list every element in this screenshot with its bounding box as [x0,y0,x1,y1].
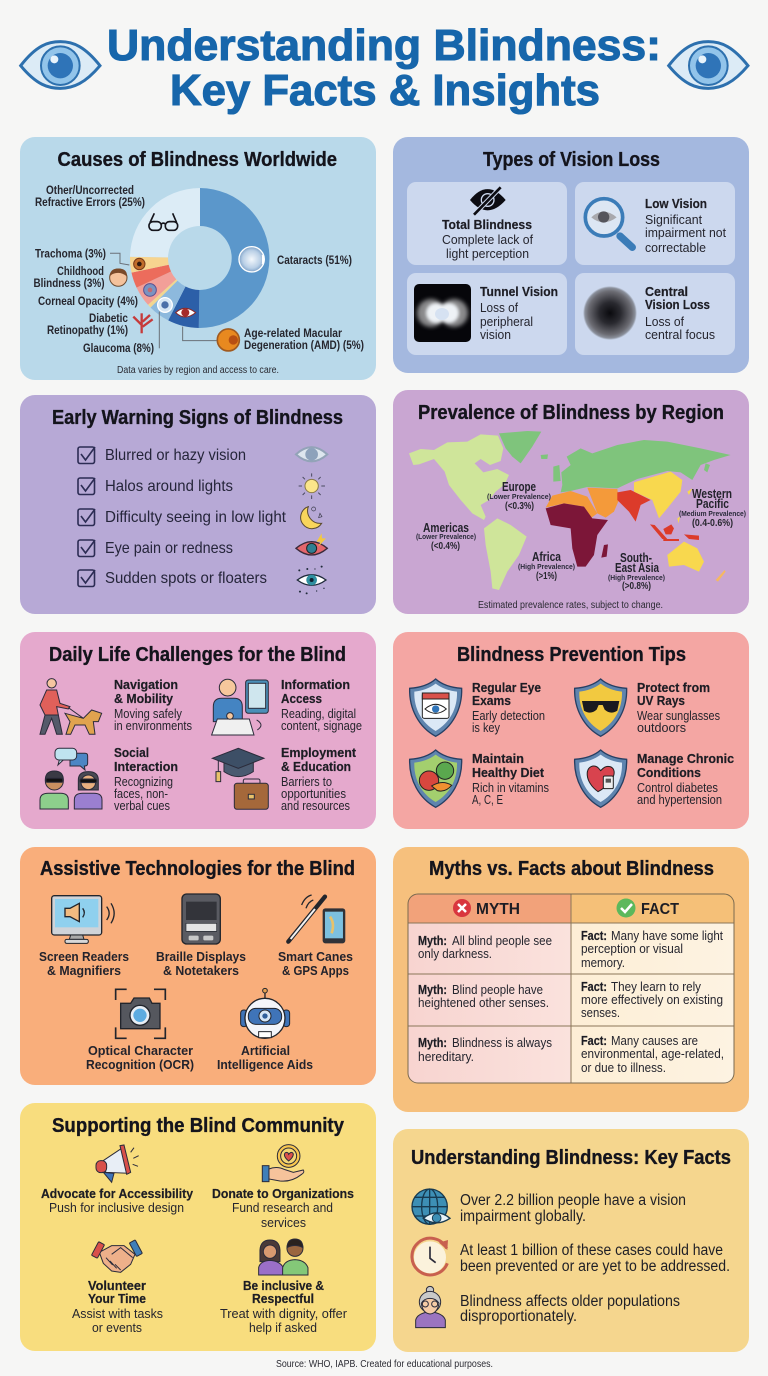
item: be inclusive: Treat with dignity, offer [220,1306,348,1321]
myth cells: hereditary. [418,1049,474,1064]
fact cells: environmental, age-related, [581,1046,724,1061]
checklist: Halos around lights [105,478,233,495]
tip: chronic conditions [575,750,734,807]
item: be inclusive: help if asked [249,1320,317,1335]
donut labels: Retinopathy (1%) [47,323,128,337]
item: ai aids: Artificial [241,1043,290,1058]
checklist: Sudden spots or floaters [105,570,267,587]
heading: key facts: Understanding Blindness: Key Facts [411,1147,731,1169]
checklist: Blurred or hazy vision [105,447,246,464]
map labels: South- [620,551,652,565]
item: advocate: Push for inclusive design [49,1200,184,1215]
item: advocate [41,1145,194,1215]
donut labels: Diabetic [89,311,128,325]
map labels: (High Prevalence) [608,573,665,582]
panel: prevention tips [393,632,749,829]
item: ocr: Optical Character [88,1043,193,1058]
item: employment: Employment [281,745,357,760]
map labels: (<0.3%) [505,501,534,512]
card: low vision: Low Vision [645,196,707,211]
item: be inclusive [220,1239,348,1335]
icons: warning signs [296,447,327,594]
item: braille displays [156,894,246,978]
heading: prevention: Blindness Prevention Tips [457,644,686,666]
tip: regular eye exams: is key [472,721,501,735]
card: central vision loss: central focus [645,327,715,342]
heading: early warning: Early Warning Signs of Blindness [52,407,343,429]
card: low vision: Significant [645,212,702,227]
item: volunteer: Volunteer [88,1278,146,1293]
item: volunteer: Your Time [88,1291,146,1306]
map labels: (Lower Prevalence) [416,532,476,541]
item: screen readers: & Magnifiers [47,963,121,978]
heading: causes: Causes of Blindness Worldwide [58,149,337,171]
myth cells: only darkness. [418,946,492,961]
heading: prevalence: Prevalence of Blindness by Region [418,402,724,424]
fact: preventable cases [412,1238,730,1275]
fact: preventable cases: been prevented or are yet to be addressed. [460,1258,730,1275]
item: ai aids: Intelligence Aids [217,1057,313,1072]
myth cells: Blindness is always [452,1035,552,1050]
title [107,21,661,115]
donut labels: Trachoma (3%) [35,246,106,260]
item: donate: services [261,1215,306,1230]
panel: assistive technologies [20,847,376,1085]
donut icons [110,213,264,351]
tip: healthy diet: Rich in vitamins [472,781,549,795]
item: ocr [86,989,194,1072]
item: donate: Fund research and [232,1200,333,1215]
fact cells: perception or visual [581,941,683,956]
fact cells [581,928,724,1075]
item: screen readers [39,896,129,978]
item: volunteer: Assist with tasks [72,1306,163,1321]
card: low vision [575,182,735,265]
item: social interaction [40,745,178,813]
card: central vision loss: Loss of [645,314,684,329]
item: employment: opportunities [281,787,346,801]
card: total blindness: Complete lack of [442,232,533,247]
checklist [78,447,287,587]
donut labels: Glaucoma (8%) [83,341,154,355]
card: tunnel vision: Tunnel Vision [480,284,558,299]
panel: causes of blindness [20,137,376,380]
myth cells [418,933,552,1064]
note: data varies: Data varies by region and access to care. [117,365,279,376]
world map [409,431,731,590]
item: employment: Barriers to [281,775,332,789]
donut labels: Age-related Macular [244,326,342,340]
item: ai aids [217,988,313,1072]
item: donate [212,1145,354,1230]
tip: uv protection [575,679,720,736]
note: estimated rates: Estimated prevalence rates, subject to change. [478,600,663,611]
fact cells: or due to illness. [581,1060,666,1075]
item: advocate: Advocate for Accessibility [41,1186,194,1201]
item: navigation [40,677,192,734]
myth cells: Myth: [418,982,447,997]
item: navigation: & Mobility [114,691,174,706]
fact: older populations: Blindness affects older populations [460,1293,680,1310]
donut labels: Blindness (3%) [34,276,105,290]
item: employment: and resources [281,799,350,813]
title: Key Facts & Insights [170,66,600,115]
item: braille displays: & Notetakers [163,963,239,978]
card: tunnel vision: peripheral [480,314,533,329]
map labels: (<0.4%) [431,541,460,552]
tip: uv protection: Protect from [637,680,710,695]
myth cells: Myth: [418,933,447,948]
table: myths and facts [408,894,734,1083]
fact: older populations [416,1286,680,1328]
item: information access: Reading, digital [281,707,356,721]
map labels: (High Prevalence) [518,562,575,571]
heading: myths: Myths vs. Facts about Blindness [429,858,714,880]
myth cells: All blind people see [452,933,552,948]
fact cells: memory. [581,955,625,970]
donut labels: Cataracts (51%) [277,253,352,267]
fact cells: senses. [581,1005,620,1020]
heading: daily life: Daily Life Challenges for the Blind [49,644,346,666]
map labels: (>1%) [536,571,557,582]
panel: types of vision loss [393,137,749,373]
item: ocr: Recognition (OCR) [86,1057,194,1072]
map labels: (Lower Prevalence) [487,492,551,501]
title: Understanding Blindness: [107,21,661,70]
item: employment: & Education [281,759,351,774]
map labels: (Medium Prevalence) [679,509,746,518]
item: employment [212,745,357,813]
item: volunteer [72,1240,163,1335]
card: low vision: correctable [645,240,706,255]
item: information access: Access [281,691,322,706]
card: tunnel vision: vision [480,327,511,342]
item: information access [212,677,362,735]
item: be inclusive: Be inclusive & [243,1278,324,1293]
panel: key facts [393,1129,749,1352]
donut labels [34,183,364,355]
tip: healthy diet: A, C, E [472,793,503,807]
source line: Source: WHO, IAPB. Created for educational purposes. [276,1359,493,1370]
myth cells: Blind people have [452,982,543,997]
fact cells: They learn to rely [611,979,701,994]
card: total blindness: light perception [446,246,529,261]
tip: uv protection: outdoors [637,721,686,735]
donut labels: Refractive Errors (25%) [35,195,145,209]
card: total blindness [407,182,567,265]
fact cells: Fact: [581,928,607,943]
item: social interaction: Interaction [114,759,178,774]
card: central vision loss: Central [645,284,688,299]
icon: right eye [669,42,748,88]
tip: chronic conditions: Manage Chronic [637,751,734,766]
fact: preventable cases: At least 1 billion of these cases could have [460,1242,723,1259]
fact cells: Fact: [581,979,607,994]
map labels: Africa [532,550,562,564]
item: social interaction: Social [114,745,149,760]
tip: regular eye exams: Early detection [472,709,545,723]
donut labels: Corneal Opacity (4%) [38,294,138,308]
tip: chronic conditions: Conditions [637,765,701,780]
item: smart canes [278,895,353,978]
item: volunteer: or events [92,1320,142,1335]
panel: prevalence by region [393,390,749,614]
tip: regular eye exams: Exams [472,693,511,708]
item: information access: Information [281,677,350,692]
map labels: Europe [502,480,536,494]
heading: assistive: Assistive Technologies for the Blind [40,858,355,880]
item: braille displays: Braille Displays [156,949,246,964]
panel: myths vs facts [393,847,749,1112]
heading: supporting: Supporting the Blind Community [52,1115,345,1137]
panel: supporting the community [20,1103,376,1351]
tip: uv protection: Wear sunglasses [637,709,720,723]
fact cells: Many have some light [611,928,723,943]
map labels: (>0.8%) [622,581,651,592]
icon: left eye [21,42,100,88]
item: smart canes: Smart Canes [278,949,353,964]
fact: global impairment: Over 2.2 billion people have a vision [460,1192,686,1209]
card: tunnel vision [407,273,567,355]
checklist: Difficulty seeing in low light [105,509,287,526]
header: fact [616,898,679,918]
item: information access: content, signage [281,719,362,733]
card: low vision: impairment not [645,225,726,240]
item: be inclusive: Respectful [252,1291,314,1306]
panel: daily life challenges [20,632,376,829]
donut labels: Other/Uncorrected [46,183,134,197]
item: navigation: Navigation [114,677,178,692]
myth cells: heightened other senses. [418,995,549,1010]
heading: types: Types of Vision Loss [483,149,660,171]
fact: global impairment [412,1189,686,1225]
tip: healthy diet [410,750,549,807]
myth cells: Myth: [418,1035,447,1050]
fact: global impairment: impairment globally. [460,1208,586,1225]
tip: healthy diet: Healthy Diet [472,765,545,780]
item: donate: Donate to Organizations [212,1186,354,1201]
fact: older populations: disproportionately. [460,1308,577,1325]
item: screen readers: Screen Readers [39,949,129,964]
header: fact: FACT [641,901,679,918]
fact cells: more effectively on existing [581,992,723,1007]
card: central vision loss: Vision Loss [645,297,710,312]
map labels [416,480,746,592]
map labels: Americas [423,521,469,535]
item: smart canes: & GPS Apps [282,963,349,978]
item: social interaction: verbal cues [114,799,170,813]
map labels: (0.4-0.6%) [692,518,733,529]
donut chart [130,188,269,328]
panel: early warning signs [20,395,376,614]
item: navigation: Moving safely [114,707,183,721]
tip: healthy diet: Maintain [472,751,524,766]
map labels: Pacific [696,497,729,511]
tip: uv protection: UV Rays [637,693,685,708]
map labels: Western [692,487,732,501]
donut labels: Childhood [57,264,104,278]
item: social interaction: Recognizing [114,775,173,789]
item: social interaction: faces, non- [114,787,168,801]
donut labels: Degeneration (AMD) (5%) [244,338,364,352]
tip: regular eye exams [410,679,545,736]
tip: chronic conditions: Control diabetes [637,781,718,795]
card: tunnel vision: Loss of [480,300,518,315]
map labels: East Asia [615,561,660,575]
item: navigation: in environments [114,719,192,733]
checklist: Eye pain or redness [105,540,233,557]
header: myth: MYTH [476,901,520,918]
card: central vision loss [575,273,735,355]
card: total blindness: Total Blindness [442,217,532,232]
fact cells: Fact: [581,1033,607,1048]
fact cells: Many causes are [611,1033,698,1048]
tip: regular eye exams: Regular Eye [472,680,541,695]
tip: chronic conditions: and hypertension [637,793,722,807]
header: myth [453,899,520,918]
